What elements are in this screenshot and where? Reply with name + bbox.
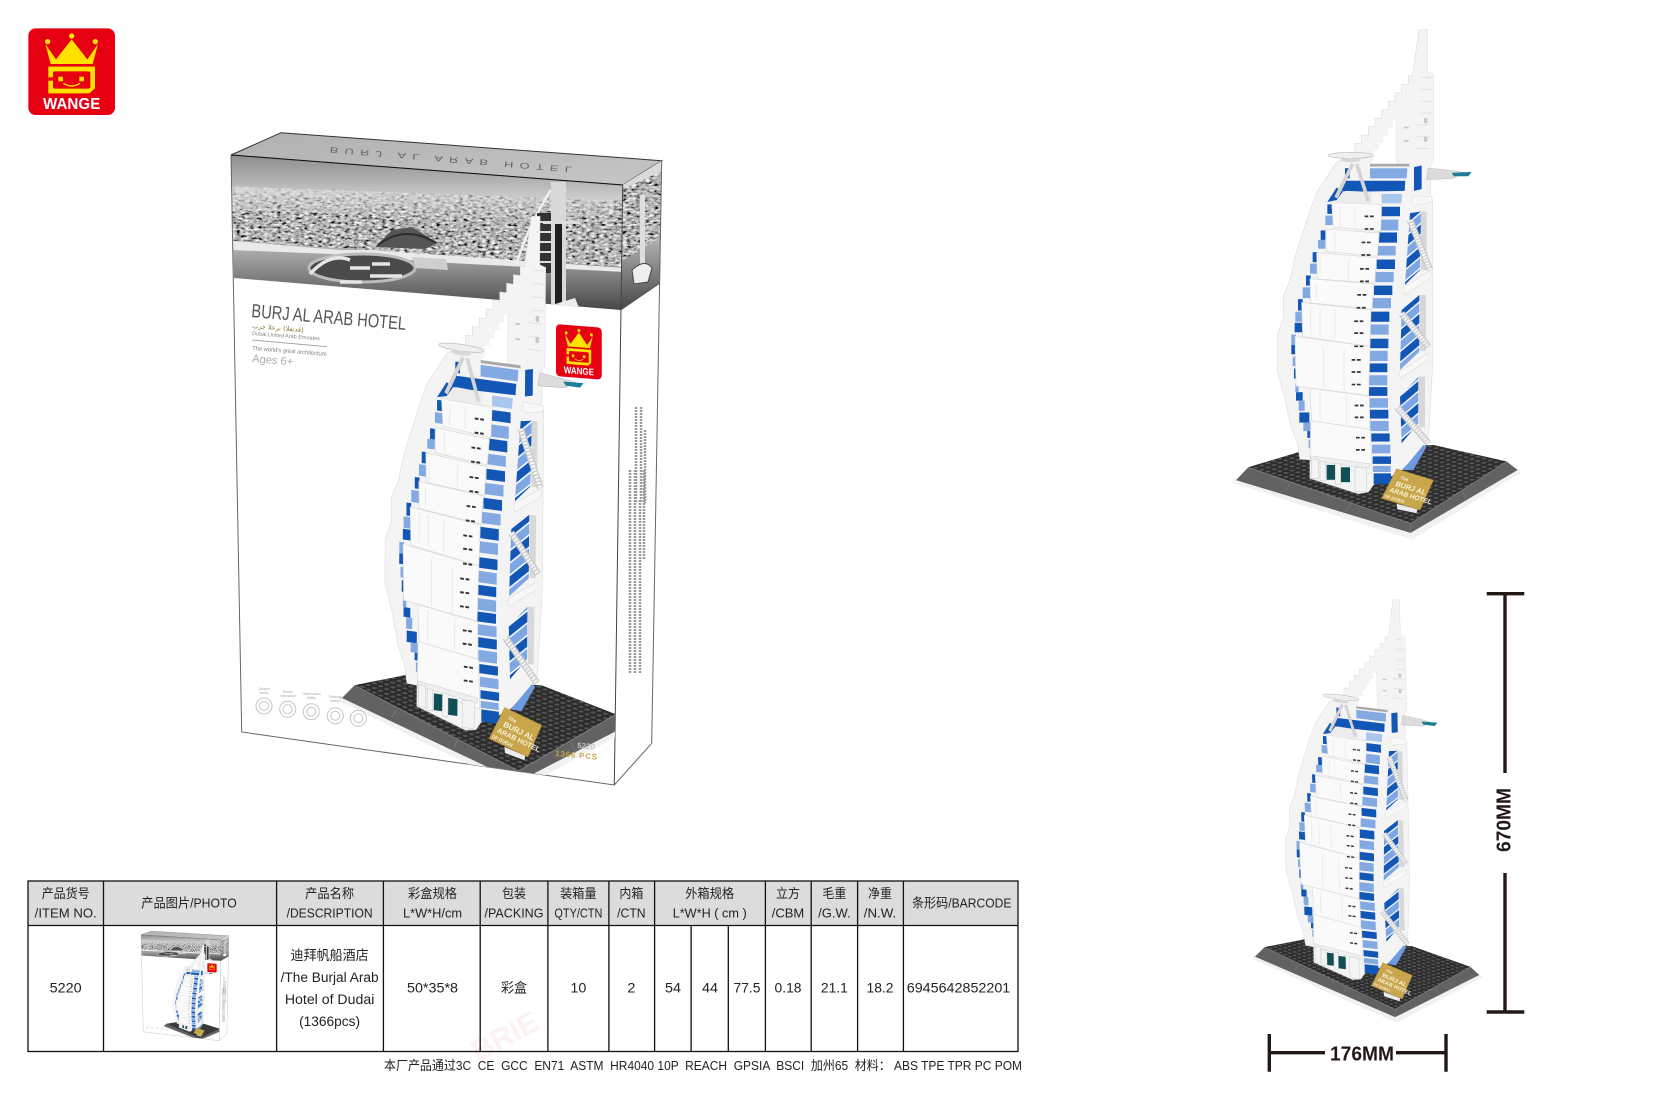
box icon labels: Thinking: [328, 695, 342, 699]
dimension: height 670MM: 670MM: [1494, 788, 1516, 852]
table header text: /PACKING: [484, 906, 544, 920]
box icon labels: Ability: [259, 691, 269, 695]
table header text: /N.W.: [864, 906, 896, 920]
box plaque text: OF DUBAI: [491, 734, 513, 748]
table header text: /G.W.: [818, 906, 851, 920]
top model plaque text: OF DUBAI: [1383, 493, 1406, 504]
dimensioned model plaque text: [1373, 967, 1418, 1001]
table header text: 包装: [502, 886, 526, 901]
table body text: 10: [570, 980, 586, 996]
box tagline: The world's great architecture: [252, 346, 328, 358]
dimensioned model plaque text: ARAB HOTEL: [1376, 977, 1413, 997]
table header text: /DESCRIPTION: [287, 906, 373, 920]
table body text: 迪拜帆船酒店: [291, 948, 369, 963]
dimension: width 176MM: 176MM: [1330, 1044, 1394, 1066]
table body text: 44: [702, 980, 719, 996]
table body text: (1366pcs): [299, 1014, 360, 1029]
box Arabic subtitle: (قدنفلا) برعلا جرب: [252, 322, 304, 334]
table header text: 装箱量: [560, 886, 597, 901]
box icon labels: Observation: [302, 692, 321, 696]
dimensioned model plaque text: BURJ AL: [1381, 973, 1408, 989]
box icon labels: Ability: [330, 699, 340, 703]
box plaque text: [491, 711, 548, 761]
box lid title: BURJ AL ARAB HOTEL: [329, 145, 572, 174]
box item number and piece count: 5220: [577, 741, 596, 752]
certification footnote: 本厂产品通过3C CE GCC EN71 ASTM HR4040 10P REACH GPSIA BSCI 加州65 材料： ABS TPE TPR PC POM: [384, 1058, 1022, 1073]
product specification table: [28, 881, 1018, 1052]
table header text: 条形码/BARCODE: [912, 896, 1012, 910]
table body text: 18.2: [866, 980, 894, 996]
product box illustration: [225, 133, 665, 801]
top model plaque text: BURJ AL: [1394, 479, 1429, 497]
box item number and piece count: 1366 PCS: [555, 749, 598, 762]
table header text: 毛重: [822, 886, 846, 901]
table header text: 立方: [776, 886, 800, 901]
table header text: QTY/CTN: [554, 906, 602, 920]
box plaque text: ARAB HOTEL: [496, 727, 542, 754]
top model plaque text: ARAB HOTEL: [1388, 487, 1433, 506]
table body text: Hotel of Dudai: [285, 992, 374, 1007]
box title: BURJ AL ARAB HOTEL: [251, 301, 407, 335]
box location line: Dubai,United Arab Emirates: [252, 331, 320, 342]
table body text: 5220: [50, 980, 82, 996]
table header text: L*W*H/cm: [403, 906, 462, 920]
table body text: [50, 948, 1010, 1029]
table body text: /The Burjal Arab: [281, 970, 379, 985]
table body text: 77.5: [734, 980, 760, 996]
table header text: 彩盒规格: [408, 886, 457, 901]
table header text: 产品货号: [42, 886, 90, 901]
dimensioned model plaque text: The: [1385, 969, 1393, 975]
table header text: 产品图片/PHOTO: [141, 896, 237, 910]
table header text: 内箱: [619, 886, 643, 901]
table body text: 54: [665, 980, 682, 996]
table header text: 产品名称: [305, 886, 354, 901]
box plaque text: The: [507, 716, 518, 725]
box plaque text: BURJ AL: [502, 720, 536, 743]
table body text: 6945642852201: [907, 980, 1010, 996]
table body text: 50*35*8: [407, 980, 458, 996]
table header text: /ITEM NO.: [35, 906, 97, 920]
box icon labels: Teams: [283, 690, 293, 694]
table body text: 彩盒: [501, 980, 527, 996]
dimension: height 670MM: [1487, 594, 1524, 1012]
table body text: 2: [627, 980, 635, 996]
dimensioned model plaque text: OF DUBAI: [1373, 982, 1390, 993]
top model plaque text: [1383, 474, 1439, 511]
box rule: [252, 340, 327, 347]
table grid: [28, 881, 1018, 1052]
table header background: [28, 881, 1018, 926]
table body text: 0.18: [774, 980, 802, 996]
top model plaque text: The: [1399, 475, 1410, 482]
box item number and piece count: [555, 741, 598, 762]
table header text: [35, 886, 1012, 920]
table body text: 21.1: [821, 980, 848, 996]
faint watermark: BRIE: [466, 1005, 545, 1068]
logo: WANGE: WANGE: [43, 96, 101, 113]
logo: WANGE: [28, 28, 115, 115]
table header text: 净重: [868, 886, 892, 901]
table header text: L*W*H ( cm ): [673, 906, 747, 920]
table header text: /CTN: [617, 906, 646, 920]
table header text: /CBM: [772, 906, 804, 920]
dimension: width 176MM: [1269, 1034, 1446, 1072]
box icon labels: Interaction: [280, 694, 296, 698]
box icon labels: Ability: [307, 696, 316, 700]
box icon labels: [257, 687, 342, 703]
box icon labels: Creative: [257, 687, 271, 691]
model photo: dimensioned: [1245, 581, 1482, 1031]
box age mark: Ages 6+: [252, 353, 294, 368]
table thumbnail of box: [140, 931, 230, 1043]
model photo: top: [1233, 29, 1520, 537]
table header text: 外箱规格: [685, 886, 734, 901]
box logo text: WANGE: [564, 365, 594, 378]
